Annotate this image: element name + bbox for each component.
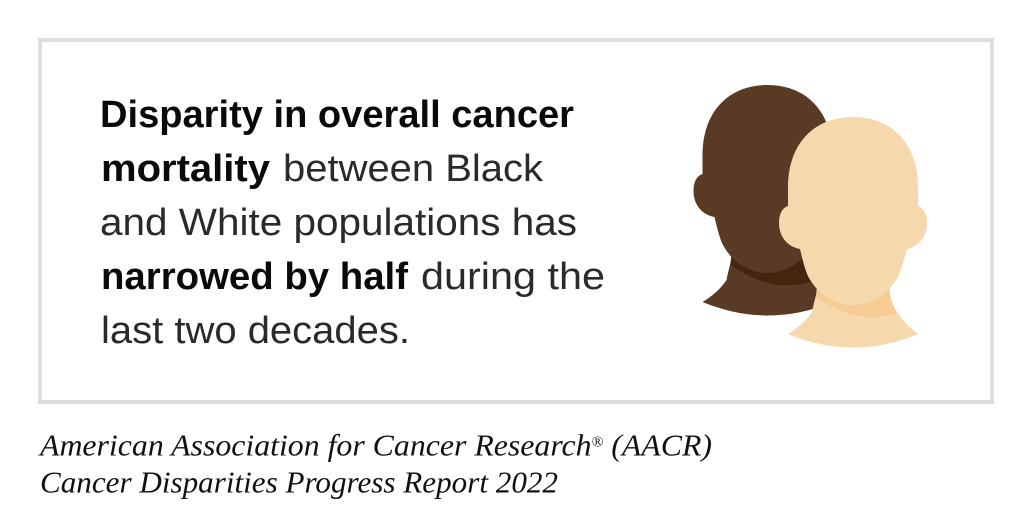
icon: light head: [779, 117, 927, 348]
main statement: during the: [421, 256, 605, 298]
main statement: Disparity in overall cancer: [100, 94, 574, 136]
source caption: Cancer Disparities Progress Report 2022: [40, 464, 558, 500]
source caption: (AACR): [603, 428, 712, 462]
icon: dark head: [694, 85, 842, 316]
panel: framed message: [40, 40, 992, 402]
main statement: narrowed by half: [101, 256, 408, 298]
neck shadow: [730, 253, 812, 285]
main statement: and White populations has: [100, 202, 577, 244]
neck shadow: [816, 285, 897, 317]
main statement: between Black: [283, 148, 544, 190]
main statement: last two decades.: [101, 310, 410, 352]
source caption: [38, 428, 712, 500]
main statement: [100, 94, 605, 352]
source caption: ®: [592, 434, 603, 450]
source caption: American Association for Cancer Research: [40, 428, 577, 462]
icon: two head silhouettes: [694, 85, 927, 348]
main statement: mortality: [101, 148, 270, 190]
